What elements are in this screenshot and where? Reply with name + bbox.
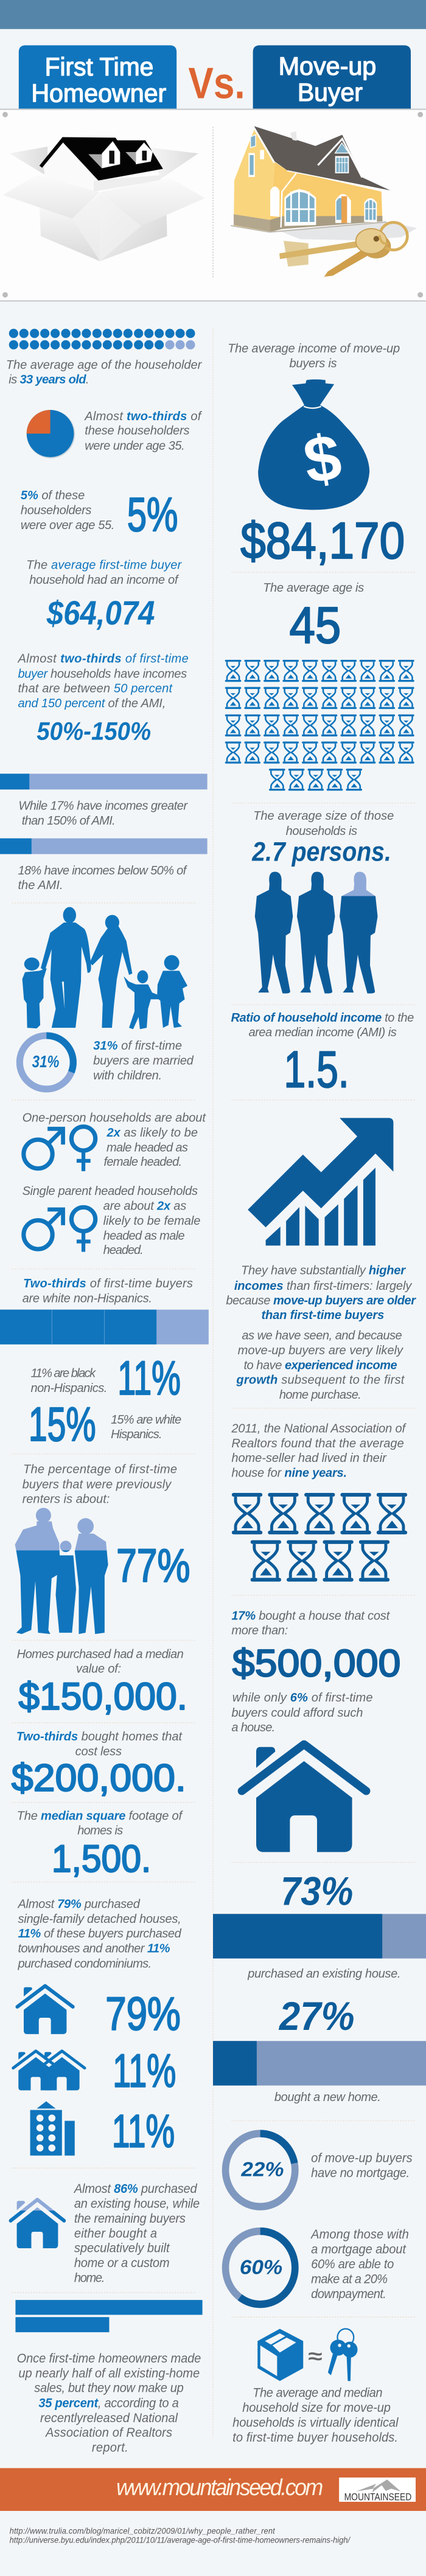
text: two-thirds white non-hispanics: Two-thirds of first-time buyers [23,1277,193,1290]
text: 17 percent bought: more than: [231,1624,288,1638]
text: 5 percent over 55: 5% of these [21,489,85,502]
text: average income [228,342,400,370]
heading: move-up buyer: Move-up [279,52,376,80]
text: household size identical [232,2386,399,2445]
bar: two-thirds [0,1310,209,1345]
text: 17 percent bought [231,1609,391,1638]
donut chart: 22 percent [226,2133,295,2207]
text: 31 percent married with children: buyers are married [93,1054,194,1067]
pie chart: two-thirds under 35 [27,410,75,459]
big number: 27%: 27% [278,1994,355,2039]
heading: vs: Vs. [188,60,245,108]
text: 20 percent downpayment: 60% are able to [311,2257,394,2271]
donut chart: 60 percent [226,2231,295,2304]
dot chart: average age 33 [9,329,195,350]
main column divider [212,328,214,2438]
text: only 6 percent [231,1691,372,1734]
text: two-thirds between 50 and 150 percent: that are between 50 percent [18,682,173,695]
heading: first time homeowner [19,46,176,109]
text: single parent households: headed as male [103,1229,185,1242]
text: 35 percent of sales: up nearly half of all existing-home [18,2366,200,2381]
text: household size identical: The average and median [253,2386,383,2400]
bars: share of existing-home sales [15,2300,203,2332]
text: 18 percent: the AMI. [18,879,63,892]
text: previously renters: buyers that were previously [23,1478,172,1491]
text: higher incomes: because move-up buyers are older [226,1294,416,1307]
big number: $84,170: $84,170 [240,511,405,569]
big number: $64,074: $64,074 [46,594,155,632]
text: 15 percent white hispanics: Hispanics. [111,1428,162,1441]
text: 86 percent existing house: either bought a [74,2226,157,2240]
text: 5 percent over 55 [21,489,114,532]
sources: http://www.trulia.com/blog/maricel_cobitz/2009/01/why_people_rather_rent [10,2526,276,2536]
icon: three men [255,871,378,994]
text: single parent households [23,1185,200,1257]
text: income growth: move-up buyers are very likely [238,1344,404,1357]
donut chart: 31 percent: 31% [32,1052,59,1071]
panel: illustration band [0,109,426,302]
text: average income: buyers is [289,357,337,370]
text: single parent households: Single parent headed households [23,1185,198,1198]
icon: box approximately equals keys [257,2329,358,2381]
text: two-thirds under 35: these householders [85,424,190,438]
text: 86 percent existing house: home or a custom [74,2256,170,2270]
heading: move-up buyer [253,46,411,109]
text: household size identical: household size for move-up [242,2401,391,2415]
donut chart: 60 percent: 60% [240,2256,282,2279]
big number: $200,000: $200,000. [12,1757,186,1799]
icon: family of three filled to 77 percent [15,1508,108,1634]
text: 15 percent white hispanics: 15% are white [111,1413,181,1427]
text: 31 percent married with children [93,1039,194,1082]
text: two-thirds cost less [16,1730,183,1759]
text: 17 percent [18,800,188,828]
icon: detached house [17,1986,73,2034]
text: ratio of income [231,1011,414,1039]
text: 17 percent: than 150% of AMI. [22,814,116,828]
big number: 45: 45 [289,596,341,654]
icon: yellow house with keys [231,126,417,278]
text: higher incomes: They have substantially higher [241,1264,406,1278]
text: 20 percent downpayment: downpayment. [311,2287,386,2301]
text: home types: single-family detached houses, [18,1913,181,1926]
text: previously renters: renters is about: [23,1492,110,1506]
big number: 79%: 79% [105,1988,181,2040]
text: income growth: as we have seen, and because [242,1329,402,1343]
text: no mortgage [311,2151,413,2180]
logo: mountainseed [339,2477,416,2503]
text: first-time income: household had an income of [29,573,180,587]
icon: money bag: $ [299,420,346,497]
sources: http://universe.byu.edu/index.php/2011/10/11/average-age-of-first-time-homeowners-remains-high/ [10,2535,351,2545]
panel: first-time homeowner column [0,329,209,2454]
text: one-person households: 2x as likely to be [106,1126,198,1140]
text: two-thirds under 35: were under age 35. [85,439,185,452]
text: 86 percent existing house: home. [74,2271,105,2285]
text: 86 percent existing house: Almost 86% purchased [73,2182,197,2196]
text: 35 percent of sales: recentlyreleased National [40,2411,178,2425]
icon: male and female symbols [24,1127,96,1171]
donut chart: 22 percent: 22% [240,2158,284,2181]
text: home types [17,1897,182,1970]
text: 31 percent married with children: with children. [93,1069,162,1082]
text: 20 percent downpayment: make at a 20% [311,2272,388,2287]
text: 86 percent existing house: speculatively built [74,2241,170,2256]
text: one-person households: female headed. [104,1155,182,1169]
text: 35 percent of sales: Once first-time homeowners made [17,2351,201,2366]
text: average age [6,358,203,386]
text: only 6 percent: a house. [231,1721,275,1734]
text: new home: bought a new home. [274,2091,381,2104]
big number: 15%: 15% [29,1397,96,1451]
text: home types: 11% of these buyers purchased [18,1927,182,1941]
text: household size identical: households is virtually identical [232,2415,399,2430]
text: two-thirds white non-hispanics [23,1277,193,1306]
text: 18 percent [18,864,188,892]
text: 11 percent black: non-Hispanics. [30,1382,107,1395]
heading: first time homeowner: Homeowner [31,78,166,107]
text: single parent households: likely to be female [103,1214,200,1228]
text: previously renters [23,1463,177,1506]
text: single parent households: are about 2x as [103,1200,186,1213]
icon: box approximately equals keys: ≈ [308,2344,322,2367]
text: 11 percent black [30,1367,107,1395]
icon: money bag [258,379,369,510]
heading: first time homeowner: First Time [45,52,153,81]
icon: nine hourglasses [232,1493,407,1582]
big number: 11%: 11% [112,2105,175,2157]
icon: house in a box [2,137,205,261]
text: median value [17,1647,184,1675]
text: two-thirds cost less: cost less [75,1745,122,1759]
text: average household size [253,809,394,838]
text: two-thirds between 50 and 150 percent: buyer households have incomes [18,667,187,680]
text: two-thirds between 50 and 150 percent: Almost two-thirds of first-time [17,652,189,665]
top header band [0,0,426,29]
text: one-person households: One-person households are about [23,1112,206,1125]
text: 35 percent of sales: Association of Realtors [44,2425,172,2440]
text: no mortgage: have no mortgage. [311,2166,410,2180]
text: nine years: house for nine years. [231,1467,347,1480]
icon: male and female symbols [24,1207,96,1252]
text: two-thirds white non-hispanics: are white non-Hispanics. [23,1292,152,1306]
text: nine years [231,1422,407,1480]
text: median square footage: The median square footage of [17,1809,184,1823]
text: no mortgage: of move-up buyers [311,2151,413,2166]
text: household size identical: to first-time buyer households. [232,2430,398,2445]
text: median square footage: homes is [77,1824,123,1838]
text: two-thirds between 50 and 150 percent: and 150 percent of the AMI, [18,697,166,710]
text: only 6 percent: buyers could afford such [231,1706,363,1720]
title [19,46,411,109]
text: home types: townhouses and another 11% [18,1942,170,1956]
text: nine years: 2011, the National Association of [231,1422,407,1435]
text: higher incomes: incomes than first-timers: largely [234,1279,413,1293]
big number: 11%: 11% [113,2045,176,2097]
text: 17 percent bought: 17% bought a house that cost [231,1609,391,1622]
icon: large house [242,1744,366,1852]
text: 35 percent of sales: report. [92,2440,128,2454]
big number: 50%-150%: 50%-150% [37,717,151,746]
icon: townhouses [13,2051,85,2090]
text: 15 percent white hispanics [111,1413,181,1441]
text: 20 percent downpayment: a mortgage about [311,2242,407,2257]
icon: family silhouette [23,907,187,1029]
text: 35 percent of sales: 35 percent, according to a [38,2396,179,2411]
text: one-person households: male headed as [106,1141,188,1154]
big number: 5%: 5% [127,487,178,541]
text: first-time income [26,559,183,587]
text: higher incomes: than first-time buyers [261,1309,384,1322]
logo: mountainseed: MOUNTAINSEED [344,2491,411,2503]
text: 5 percent over 55: householders [21,504,91,518]
text: home types: Almost 79% purchased [17,1898,141,1911]
text: ratio of income: area median income (AMI) is [248,1026,397,1039]
text: nine years: home-seller had lived in their [231,1452,387,1465]
text: income growth: growth subsequent to the first [236,1373,405,1387]
text: median square footage [17,1809,184,1838]
text: two-thirds cost less: Two-thirds bought homes that [16,1730,183,1743]
big number: 11%: 11% [117,1351,181,1405]
text: median value: value of: [76,1662,121,1675]
text: 5 percent over 55: were over age 55. [21,519,114,532]
text: average household size: households is [286,825,357,838]
text: single parent households: headed. [103,1244,144,1257]
text: average age: The average age is [263,581,364,595]
big number: 1,500: 1,500. [52,1838,151,1880]
bar: 18 percent [0,839,208,854]
donut chart: 31 percent [19,1036,73,1089]
text: 86 percent existing house: the remaining buyers [74,2211,186,2226]
text: average age: is 33 years old. [9,373,89,386]
text: 11 percent black: 11% are black [30,1367,96,1380]
text: one-person households [23,1112,206,1169]
text: nine years: Realtors found that the average [231,1437,404,1450]
text: average household size: The average size of those [253,809,394,823]
big number: 1.5: 1.5. [284,1040,349,1098]
chart: rising arrow with bars [248,1118,393,1245]
text: ratio of income: Ratio of household income to the [231,1011,414,1025]
heading: move-up buyer: Buyer [298,78,363,106]
text: 31 percent married with children: 31% of first-time [93,1039,182,1053]
text: only 6 percent: while only 6% of first-time [232,1691,372,1705]
text: 35 percent of sales: sales, but they now make up [34,2381,184,2395]
text: higher incomes [226,1264,416,1322]
text: first-time income: The average first-time buyer [26,559,183,572]
text: 86 percent existing house [73,2182,200,2285]
text: home types: purchased condominiums. [17,1957,152,1970]
text: income growth [236,1329,405,1402]
text: average income: The average income of move-up [228,342,400,355]
sources [10,2526,351,2545]
big number: 73%: 73% [281,1869,353,1914]
text: income growth: home purchase. [279,1388,361,1402]
bar: 17 percent [0,774,208,789]
text: existing house: purchased an existing house. [247,1967,400,1981]
text: 17 percent: While 17% have incomes greater [18,800,188,813]
bar: 27 percent [213,2041,426,2085]
text: two-thirds under 35: Almost two-thirds of [84,410,203,423]
text: 86 percent existing house: an existing house, while [74,2197,200,2211]
footer band [0,2468,426,2511]
bar: 73 percent [213,1914,426,1959]
panel: move-up buyer column [213,342,426,2445]
icon: house 86 percent [10,2200,64,2248]
icon: 45 hourglasses [225,660,414,791]
icon: condominium building [30,2101,75,2156]
text: income growth: to have experienced income [243,1359,397,1372]
text: median value: Homes purchased had a median [17,1647,184,1661]
text: two-thirds between 50 and 150 percent [17,652,189,710]
big number: 2.7 persons: 2.7 persons. [251,837,391,867]
text: 20 percent downpayment: Among those with [310,2228,409,2242]
big number: $150,000: $150,000. [18,1675,187,1718]
text: average age: The average age of the householder [6,358,203,372]
big number: $500,000: $500,000 [232,1642,400,1684]
text: 18 percent: 18% have incomes below 50% of [18,864,188,878]
big number: 77%: 77% [116,1540,190,1592]
website url: www.mountainseed.com [116,2474,323,2500]
text: 35 percent of sales [17,2351,201,2454]
text: 20 percent downpayment [310,2228,409,2301]
text: two-thirds under 35 [84,410,203,452]
text: previously renters: The percentage of first-time [23,1463,177,1476]
